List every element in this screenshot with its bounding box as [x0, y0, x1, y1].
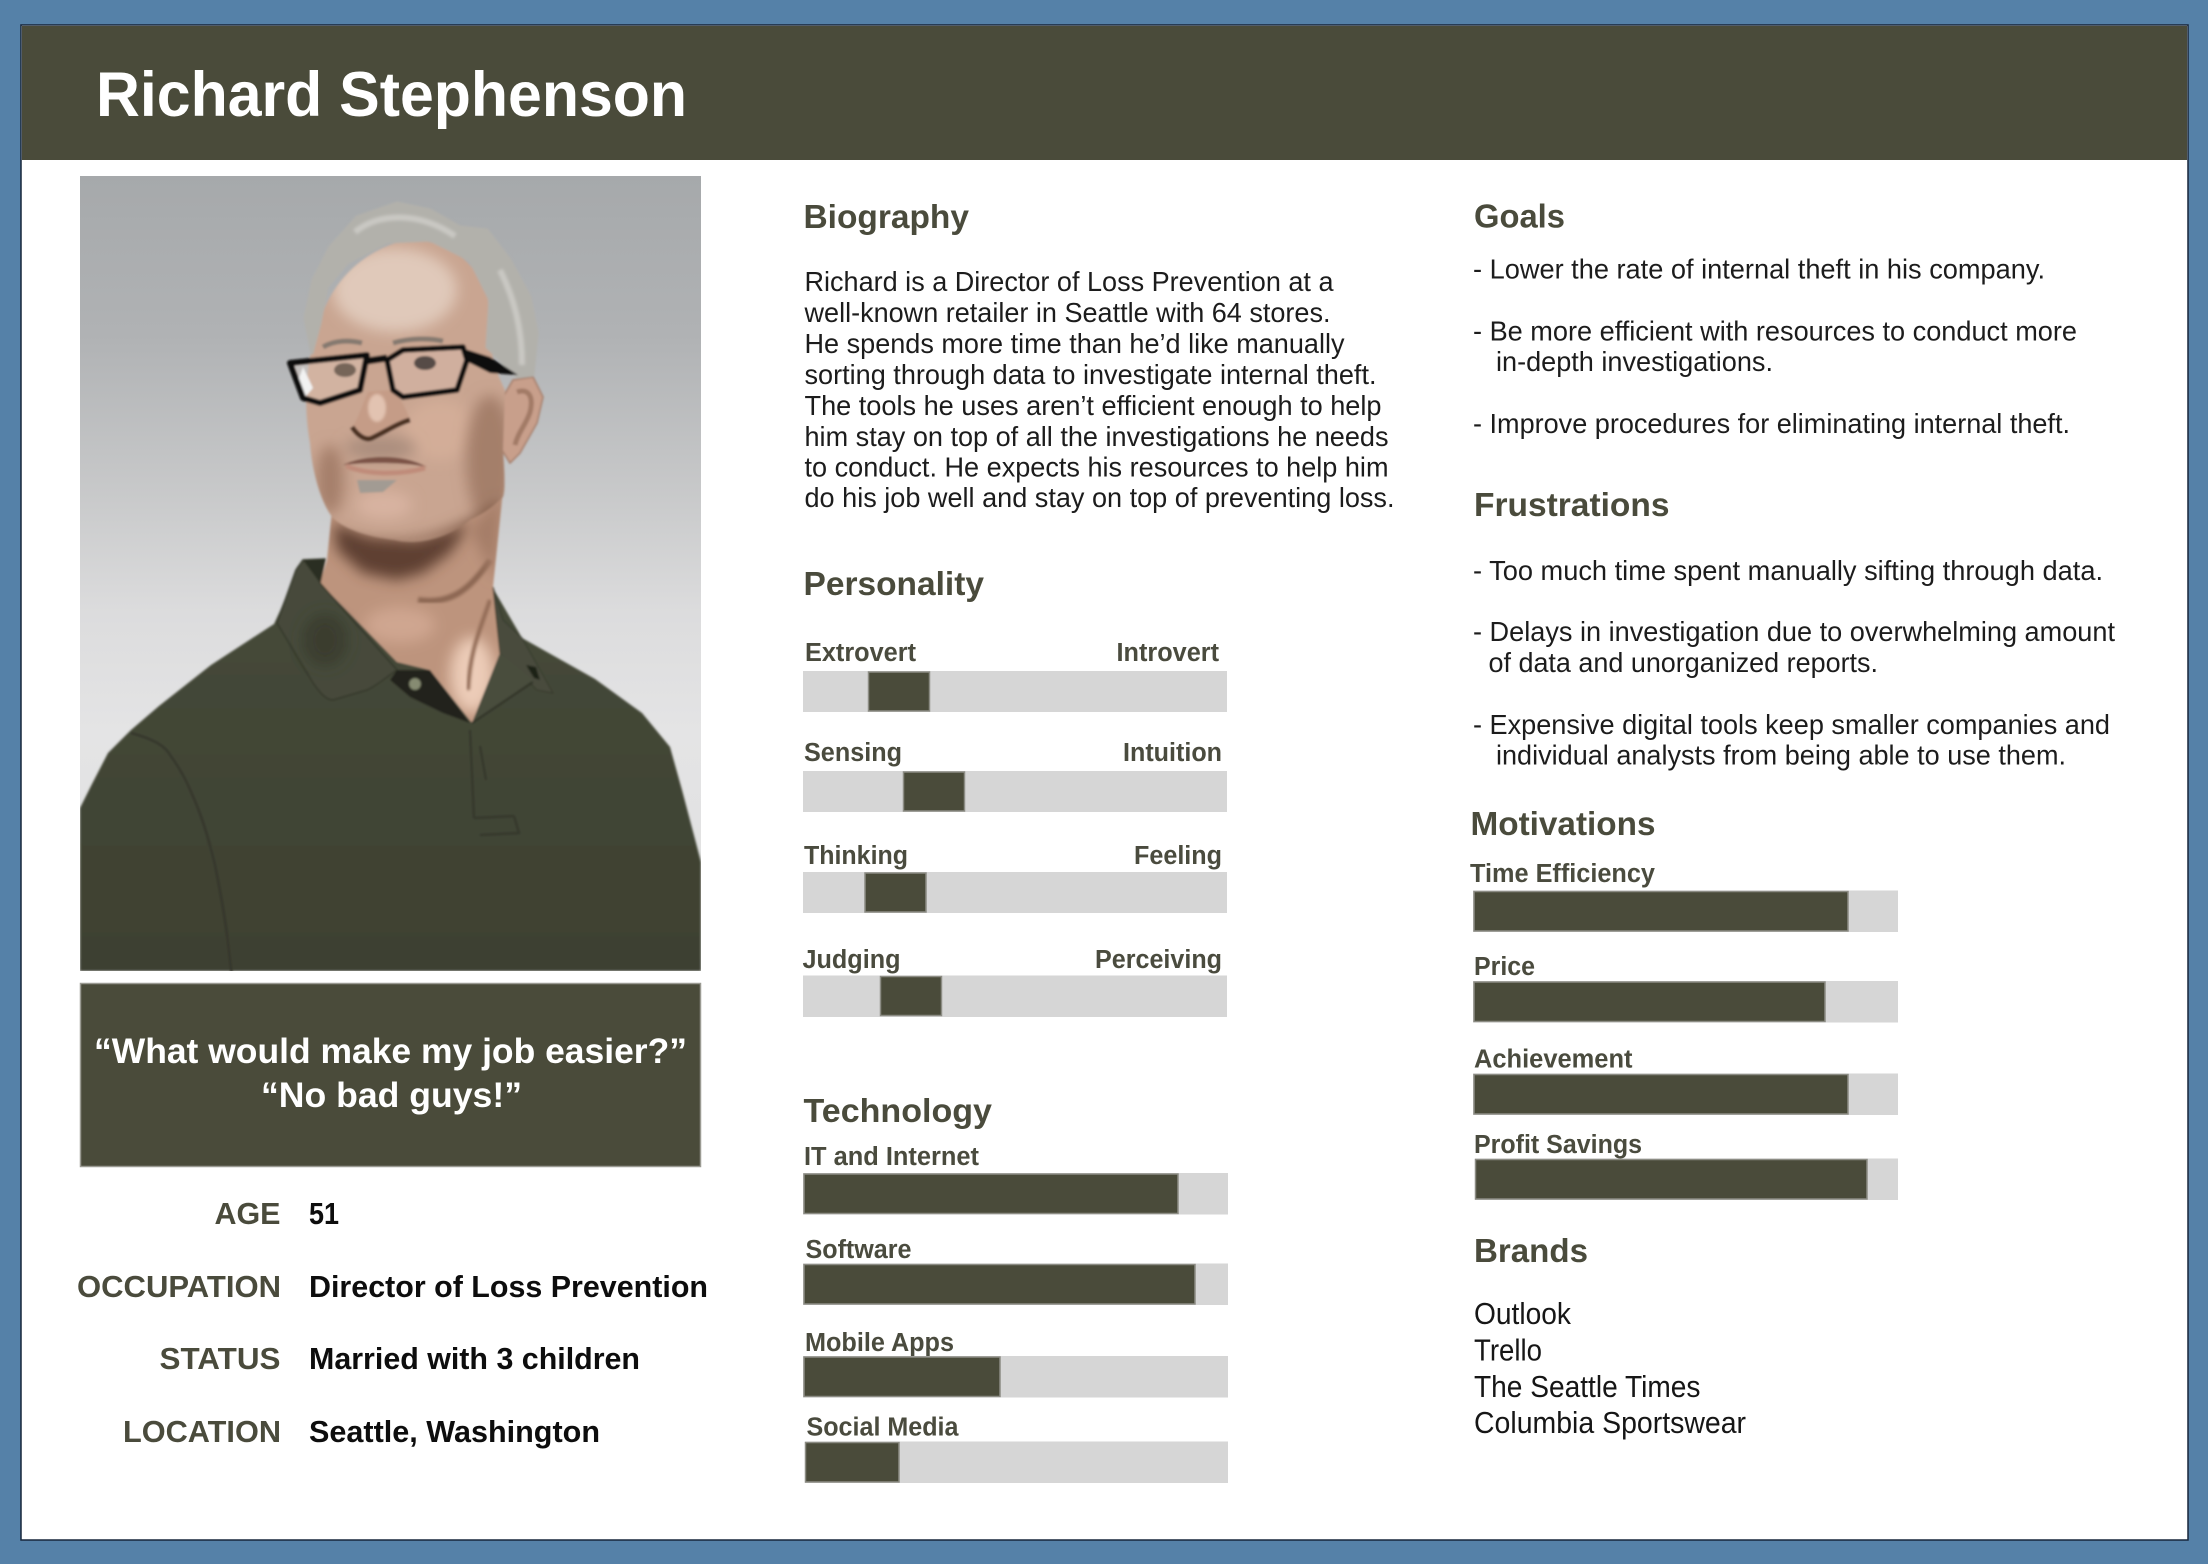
ear [502, 377, 543, 463]
biography text: sorting through data to investigate internal theft. [804, 359, 1376, 390]
bar: Software [803, 1236, 1228, 1305]
brands list: Trello [1474, 1332, 1542, 1368]
technology section [803, 1092, 1228, 1483]
slider: sensing / intuition: Sensing [804, 739, 902, 767]
face [306, 240, 505, 542]
brands heading: Brands [1474, 1232, 1588, 1269]
goals list: in-depth investigations. [1496, 346, 1773, 377]
inner placket shadow [390, 670, 470, 723]
eyebrows [323, 339, 443, 347]
placket seams [470, 730, 520, 835]
brands list: The Seattle Times [1474, 1369, 1700, 1404]
photo: portrait of Richard [80, 176, 701, 977]
goals section [1473, 198, 2077, 439]
slider: thinking / feeling [803, 842, 1227, 913]
neck skin [320, 490, 503, 723]
bar: Price [1473, 953, 1898, 1022]
goatee [357, 480, 397, 493]
bar: IT and Internet [803, 1143, 1228, 1214]
bar: Achievement [1473, 1046, 1898, 1115]
biography text: him stay on top of all the investigations he needs [804, 421, 1388, 452]
biography text: The tools he uses aren’t efficient enough to help [804, 390, 1382, 421]
bar: Social Media: Social Media [806, 1414, 959, 1442]
status label: STATUS [160, 1341, 280, 1376]
bar: Price: Price [1474, 953, 1535, 981]
polo shirt [80, 559, 701, 971]
bar: Time Efficiency: Time Efficiency [1470, 860, 1656, 888]
brands list [1474, 1296, 1746, 1440]
slider: sensing / intuition: Intuition [1123, 739, 1222, 767]
motivations heading: Motivations [1470, 805, 1656, 842]
sleeve seam [131, 733, 232, 977]
motivations section [1470, 805, 1898, 1200]
occupation label: OCCUPATION [77, 1269, 281, 1304]
bar: Profit Savings [1474, 1131, 1898, 1200]
bar: Achievement: Achievement [1474, 1046, 1633, 1074]
slider: extrovert / introvert: Extrovert [805, 639, 916, 667]
glasses [290, 355, 367, 403]
personality section [802, 565, 1227, 1017]
frustrations list: - Too much time spent manually sifting through data. [1473, 555, 2103, 586]
biography text: He spends more time than he’d like manually [804, 328, 1344, 359]
goals list: - Be more efficient with resources to conduct more [1473, 316, 2077, 346]
technology heading: Technology [804, 1092, 993, 1129]
biography text: to conduct. He expects his resources to help him [804, 452, 1388, 482]
quote line 1: “What would make my job easier?” [94, 1032, 687, 1071]
status value: Married with 3 children [309, 1341, 640, 1376]
slider: judging / perceiving: Judging [802, 946, 900, 974]
slider: sensing / intuition [803, 739, 1227, 812]
nose [355, 391, 408, 429]
biography text [804, 266, 1394, 513]
shirt collar right [492, 586, 524, 654]
goals list [1473, 254, 2077, 439]
hair [305, 203, 537, 377]
quote box [80, 984, 700, 1166]
age value: 51 [309, 1196, 339, 1231]
slider: thinking / feeling: Thinking [804, 842, 908, 870]
goals list: - Lower the rate of internal theft in his company. [1473, 254, 2045, 284]
slider: judging / perceiving [802, 946, 1227, 1017]
slider: judging / perceiving: Perceiving [1095, 946, 1222, 974]
biography text: well-known retailer in Seattle with 64 stores. [804, 297, 1330, 328]
frustrations list: - Expensive digital tools keep smaller companies and [1473, 709, 2110, 740]
bar: Profit Savings: Profit Savings [1474, 1131, 1642, 1159]
biography text: do his job well and stay on top of preventing loss. [804, 482, 1394, 513]
slider: thinking / feeling: Feeling [1134, 842, 1222, 870]
personality heading: Personality [804, 565, 985, 602]
frustrations list: of data and unorganized reports. [1488, 647, 1878, 678]
brands list: Outlook [1474, 1296, 1571, 1331]
location label: LOCATION [123, 1414, 281, 1449]
personal details [77, 1196, 708, 1449]
biography text: Richard is a Director of Loss Prevention at a [804, 266, 1334, 297]
eyes [334, 363, 356, 377]
occupation value: Director of Loss Prevention [309, 1269, 708, 1304]
frustrations list: - Delays in investigation due to overwhelming amount [1473, 616, 2115, 647]
location value: Seattle, Washington [309, 1414, 600, 1449]
bar: Mobile Apps [803, 1329, 1228, 1398]
frustrations list [1473, 555, 2115, 770]
goals heading: Goals [1474, 198, 1565, 234]
age label: AGE [214, 1196, 280, 1231]
frustrations section [1473, 486, 2115, 770]
slider: extrovert / introvert: Introvert [1116, 639, 1219, 667]
bar: Time Efficiency [1470, 860, 1898, 932]
brands section [1474, 1232, 1746, 1440]
biography heading: Biography [804, 198, 970, 235]
frustrations list: individual analysts from being able to use them. [1496, 740, 2066, 770]
lips [343, 457, 427, 467]
goals list: - Improve procedures for eliminating internal theft. [1473, 408, 2070, 439]
shirt collar left [276, 556, 397, 674]
bar: Mobile Apps: Mobile Apps [805, 1329, 954, 1357]
bar: IT and Internet: IT and Internet [804, 1143, 979, 1171]
quote line 2: “No bad guys!” [261, 1076, 522, 1115]
header band [22, 26, 2187, 160]
frustrations heading: Frustrations [1474, 486, 1670, 523]
bar: Software: Software [806, 1236, 912, 1264]
brands list: Columbia Sportswear [1474, 1405, 1746, 1440]
slider: extrovert / introvert [803, 639, 1227, 712]
bar: Social Media [805, 1414, 1228, 1483]
biography section [804, 198, 1394, 513]
title: Richard Stephenson [96, 60, 687, 130]
